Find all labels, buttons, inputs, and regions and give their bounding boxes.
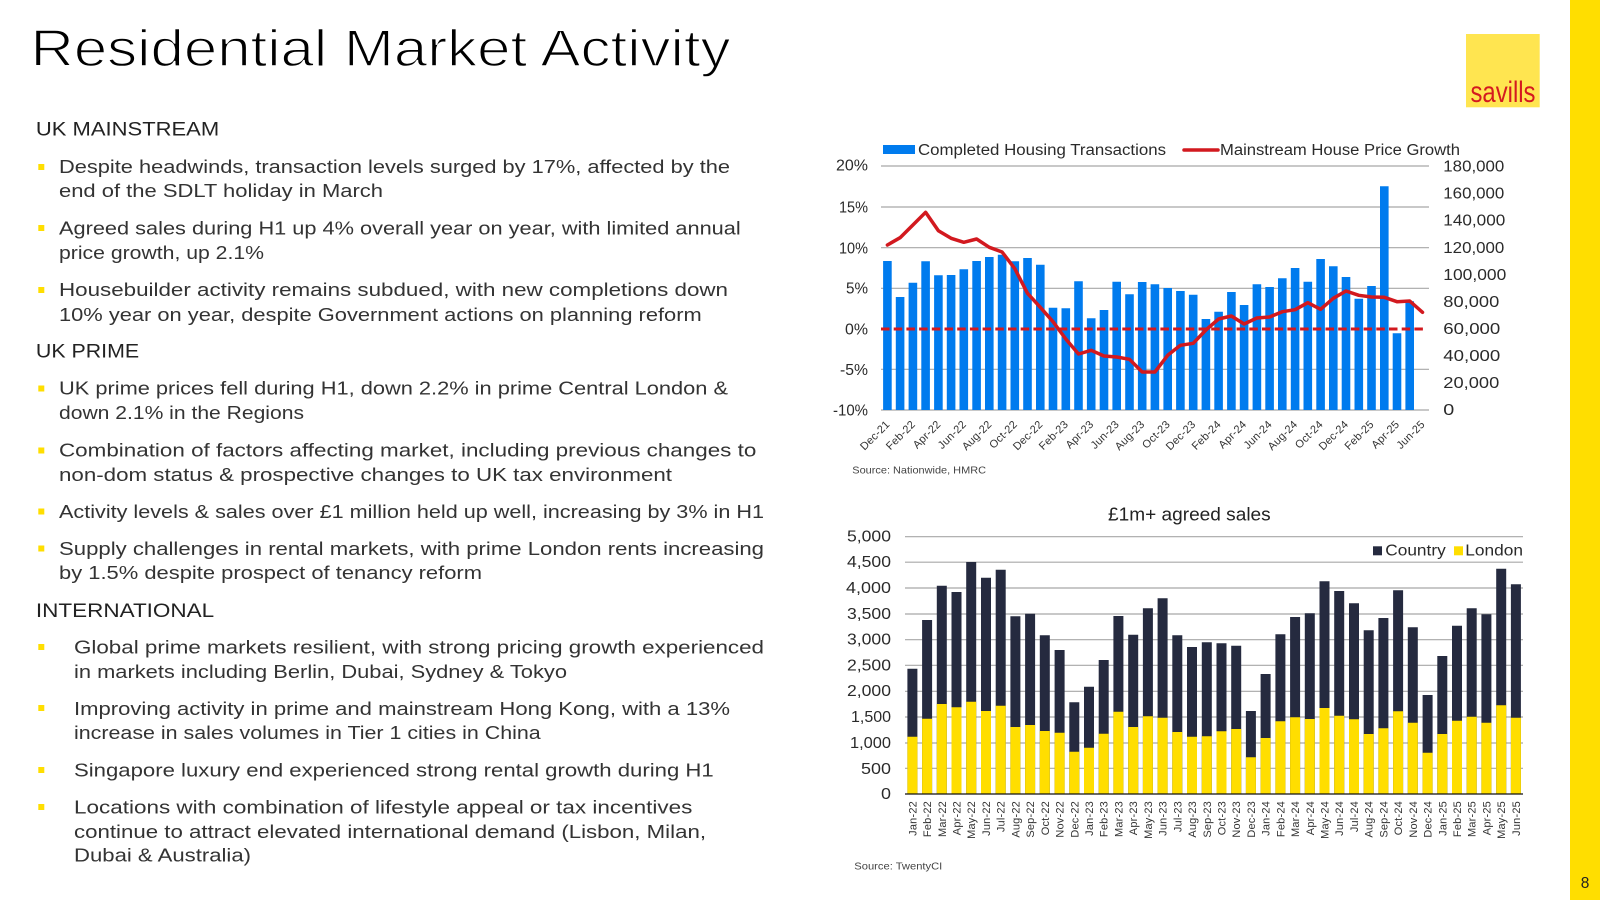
bullet: housebuilder — [38, 279, 728, 325]
bullet: global prime markets: Global prime markets resilient, with strong pricing growth experienced — [74, 636, 764, 658]
x axis labels: two-monthly dates: Dec-24 — [1317, 419, 1351, 453]
x axis labels: two-monthly dates: Apr-25 — [1369, 419, 1402, 451]
right axis: transactions — [1443, 158, 1507, 419]
x axis labels: months: May-25 — [1496, 801, 1508, 839]
right axis: transactions: 20,000 — [1443, 375, 1500, 392]
x axis labels: two-monthly dates: Feb-25 — [1343, 419, 1377, 453]
x axis labels: two-monthly dates: Oct-23 — [1140, 419, 1173, 451]
legend: country and London: Country — [1385, 543, 1446, 560]
left axis: percent growth: 5% — [846, 281, 868, 298]
left axis: percent growth: 10% — [839, 240, 868, 257]
x axis labels: two-monthly dates: Dec-23 — [1164, 419, 1198, 453]
x axis labels: two-monthly dates: Dec-22 — [1011, 419, 1045, 453]
x axis labels: two-monthly dates: Jun-22 — [936, 419, 969, 452]
bullet: agreed sales — [38, 218, 741, 263]
bars: completed housing transactions — [883, 186, 1414, 410]
y axis labels: 1,500 — [851, 709, 891, 726]
y axis labels: 4,000 — [846, 580, 891, 597]
x axis labels: months: Jun-25 — [1511, 801, 1523, 836]
x axis labels: months: Jun-23 — [1158, 801, 1170, 836]
bullet: supply challenges — [38, 538, 764, 583]
bullet: supply challenges: by 1.5% despite prospect of tenancy reform — [59, 562, 482, 583]
x axis labels: months: Mar-24 — [1290, 801, 1302, 837]
y axis labels: 1,000 — [850, 735, 891, 752]
bullet: prime prices: down 2.1% in the Regions — [59, 402, 304, 423]
left axis: percent growth: -10% — [833, 403, 868, 420]
x axis labels: two-monthly dates: Jun-23 — [1089, 419, 1122, 452]
chart title: £1m+ agreed sales — [1108, 505, 1271, 525]
left axis: percent growth — [833, 158, 868, 420]
x axis labels: months: Nov-22 — [1055, 801, 1067, 838]
legend: country and London: London — [1465, 543, 1523, 560]
x axis labels: two-monthly dates: Jun-25 — [1394, 419, 1428, 452]
x axis labels: months: May-23 — [1143, 801, 1155, 839]
right axis: transactions: 80,000 — [1443, 294, 1500, 311]
x axis labels: months: Oct-22 — [1040, 801, 1052, 835]
left axis: percent growth: 20% — [836, 158, 868, 175]
bullet: combination of factors: non-dom status & prospective changes to UK tax environment — [59, 464, 672, 485]
x axis labels: two-monthly dates: Apr-24 — [1217, 419, 1249, 451]
x axis labels: months: Jul-24 — [1349, 801, 1361, 832]
y axis labels — [846, 529, 891, 803]
y axis labels: 2,500 — [847, 657, 891, 674]
right axis: transactions: 140,000 — [1443, 213, 1506, 230]
x axis labels: two-monthly dates: Oct-24 — [1293, 419, 1326, 451]
y axis labels: 0 — [881, 786, 891, 803]
legend: transactions and price growth: Completed Housing Transactions — [918, 142, 1166, 159]
bullet: transactions — [38, 156, 730, 201]
heading: UK prime: UK PRIME — [36, 342, 139, 362]
icon: savills logo — [1466, 34, 1540, 109]
x axis labels: two-monthly dates: Aug-22 — [960, 419, 994, 453]
bullet: prime prices — [38, 378, 729, 423]
x axis labels: months: Aug-22 — [1010, 801, 1022, 838]
bullet: lifestyle locations: continue to attract elevated international demand (Lisbon, Milan, — [74, 821, 706, 842]
x axis labels: months: Oct-23 — [1216, 801, 1228, 835]
right axis: transactions: 120,000 — [1443, 240, 1505, 257]
right axis: transactions: 160,000 — [1443, 185, 1505, 202]
x axis labels: two-monthly dates: Apr-22 — [911, 419, 944, 451]
bullet: agreed sales: price growth, up 2.1% — [59, 242, 264, 263]
x axis labels: months: Dec-23 — [1246, 801, 1258, 838]
x axis labels: months: Mar-25 — [1467, 801, 1479, 837]
x axis labels: months: Apr-25 — [1481, 801, 1493, 835]
bullet: lifestyle locations — [38, 796, 706, 866]
x axis labels: months: Dec-24 — [1423, 801, 1435, 838]
left axis: percent growth: 15% — [839, 199, 868, 216]
x axis labels: months: Jul-22 — [996, 801, 1008, 832]
y axis labels: 3,000 — [847, 632, 891, 649]
x axis labels: two-monthly dates: Oct-22 — [987, 419, 1020, 451]
bullet: lifestyle locations: Locations with combination of lifestyle appeal or tax incentives — [74, 796, 692, 818]
x axis labels: months: Nov-23 — [1231, 801, 1243, 838]
x axis labels: months: Feb-25 — [1452, 801, 1464, 837]
x axis labels: months: Sep-23 — [1202, 801, 1214, 838]
bullet: global prime markets: in markets including Berlin, Dubai, Sydney & Tokyo — [74, 661, 567, 682]
x axis labels: two-monthly dates: Feb-24 — [1190, 419, 1224, 453]
x axis labels: months: Mar-23 — [1113, 801, 1125, 837]
x axis labels: two-monthly dates: Feb-23 — [1037, 419, 1071, 453]
zero line — [881, 328, 1427, 330]
y axis labels: 3,500 — [847, 606, 891, 623]
bullet: Hong Kong and China: increase in sales volumes in Tier 1 cities in China — [74, 722, 542, 743]
right axis: transactions: 40,000 — [1443, 348, 1501, 365]
x axis labels: months: Aug-24 — [1364, 801, 1376, 838]
bullet: combination of factors: Combination of factors affecting market, including previous changes to — [59, 440, 756, 460]
bars: London — [907, 702, 1521, 794]
x axis labels: two-monthly dates: Feb-22 — [884, 419, 918, 453]
x axis labels: months: Jun-22 — [981, 801, 993, 836]
bullet: lifestyle locations: Dubai & Australia) — [74, 844, 251, 866]
bullet: activity levels: Activity levels & sales over £1 million held up well, increasing by 3% in H1 — [59, 501, 764, 522]
x axis labels: two-monthly dates: Aug-23 — [1113, 419, 1147, 453]
y axis labels: 4,500 — [847, 554, 891, 571]
x axis labels: months: Mar-22 — [937, 801, 949, 837]
icon: savills logo: savills — [1470, 76, 1536, 109]
x axis labels: months: Sep-24 — [1378, 801, 1390, 838]
bullet: supply challenges: Supply challenges in rental markets, with prime London rents increasing — [59, 538, 764, 559]
bullet: global prime markets — [38, 636, 764, 682]
bullet: transactions: end of the SDLT holiday in March — [59, 180, 383, 201]
right axis: transactions: 180,000 — [1443, 158, 1505, 175]
x axis labels: months: Jan-23 — [1084, 801, 1096, 836]
heading: international: INTERNATIONAL — [36, 601, 214, 622]
x axis labels: months: Feb-24 — [1275, 801, 1287, 837]
right axis: transactions: 100,000 — [1443, 267, 1507, 284]
bullet: agreed sales: Agreed sales during H1 up 4% overall year on year, with limited annual — [59, 218, 741, 238]
heading: UK mainstream: UK MAINSTREAM — [36, 120, 219, 140]
x axis labels: two-monthly dates: Apr-23 — [1064, 419, 1096, 451]
x axis labels: months: Feb-22 — [922, 801, 934, 837]
y axis labels: 500 — [861, 761, 891, 778]
x axis labels: months: Jan-24 — [1261, 801, 1273, 836]
bullet: combination of factors — [38, 440, 756, 485]
title: Residential Market Activity — [30, 20, 730, 78]
right yellow band — [1570, 0, 1600, 900]
x axis labels: months: Dec-22 — [1069, 801, 1081, 838]
y axis labels: 5,000 — [847, 529, 891, 546]
x axis labels: two-monthly dates: Jun-24 — [1242, 419, 1275, 452]
x axis labels: two-monthly dates: Aug-24 — [1266, 419, 1300, 453]
y axis labels: 2,000 — [847, 683, 891, 700]
x axis labels: months: Jan-25 — [1437, 801, 1449, 836]
chart: housing transactions and price growth — [833, 142, 1507, 453]
x axis labels: months: Jun-24 — [1334, 801, 1346, 836]
left axis: percent growth: 0% — [845, 321, 868, 338]
x axis labels: months: Apr-23 — [1128, 801, 1140, 835]
x axis labels: months: Jul-23 — [1172, 801, 1184, 832]
page number: 8 — [1581, 875, 1589, 892]
legend: transactions and price growth: Mainstream House Price Growth — [1220, 142, 1460, 159]
x axis labels: months: May-22 — [966, 801, 978, 839]
legend: country and London — [1373, 543, 1523, 560]
x axis labels: months: Apr-22 — [952, 801, 964, 835]
source note: chart two: Source: TwentyCI — [854, 860, 942, 872]
bullet: prime prices: UK prime prices fell during H1, down 2.2% in prime Central London & — [59, 378, 729, 398]
x axis labels: months: Feb-23 — [1099, 801, 1111, 837]
x axis labels: months: Sep-22 — [1025, 801, 1037, 838]
bullet: housebuilder: 10% year on year, despite Government actions on planning reform — [59, 304, 702, 325]
bullet: transactions: Despite headwinds, transaction levels surged by 17%, affected by the — [59, 156, 730, 177]
x axis labels: two-monthly dates — [858, 419, 1428, 453]
right axis: transactions: 0 — [1443, 402, 1455, 419]
x axis labels: months: Aug-23 — [1187, 801, 1199, 838]
legend: transactions and price growth — [883, 142, 1460, 159]
x axis labels: months: Nov-24 — [1408, 801, 1420, 838]
x axis labels: months — [907, 801, 1523, 839]
right axis: transactions: 60,000 — [1443, 321, 1501, 338]
chart: £1m+ agreed sales — [846, 505, 1523, 839]
source note: chart one: Source: Nationwide, HMRC — [852, 464, 986, 476]
bullet: housebuilder: Housebuilder activity remains subdued, with new completions down — [59, 279, 728, 300]
x axis labels: months: Oct-24 — [1393, 801, 1405, 835]
x axis labels: two-monthly dates: Dec-21 — [858, 419, 893, 453]
bullet: Hong Kong and China — [38, 698, 730, 743]
bullet: Singapore: Singapore luxury end experienced strong rental growth during H1 — [74, 760, 714, 780]
x axis labels: months: May-24 — [1320, 801, 1332, 839]
left axis: percent growth: -5% — [840, 362, 868, 379]
bars: country — [907, 562, 1521, 794]
line: mainstream house price growth — [887, 212, 1422, 372]
x axis labels: months: Apr-24 — [1305, 801, 1317, 835]
bullet: Hong Kong and China: Improving activity in prime and mainstream Hong Kong, with a 13% — [74, 698, 730, 719]
x axis labels: months: Jan-22 — [907, 801, 919, 836]
